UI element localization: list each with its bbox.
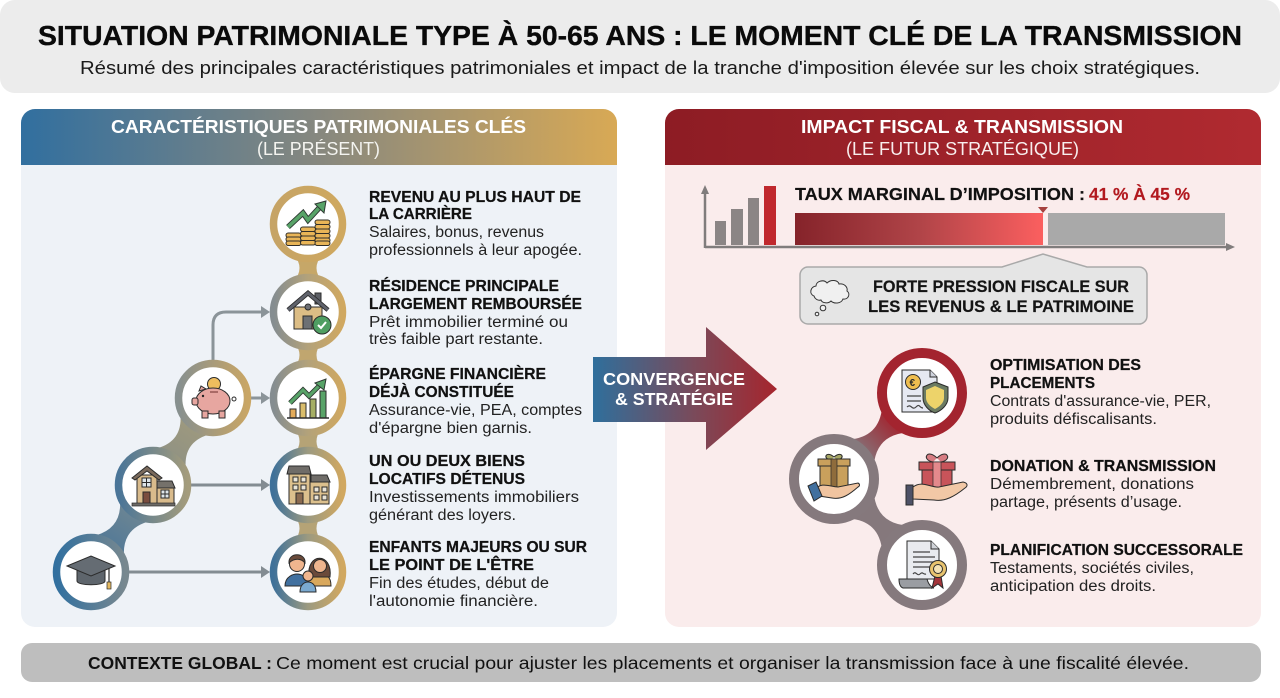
panel: caractéristiques patrimoniales [21, 109, 617, 627]
arrow: piggy to residence [213, 306, 270, 362]
item: revenu [369, 189, 582, 259]
item: optimisation [990, 357, 1211, 428]
item: planification [990, 542, 1243, 595]
callout: forte pression fiscale: LES REVENUS & LE PATRIMOINE [868, 297, 1134, 316]
icon: income coins and arrow [274, 190, 342, 258]
item: biens locatifs: Investissements immobiliers [369, 489, 579, 506]
item: revenu: Salaires, bonus, revenus [369, 224, 544, 241]
item: biens locatifs: générant des loyers. [369, 507, 516, 524]
item: biens locatifs: UN OU DEUX BIENS [369, 453, 525, 470]
item: résidence: RÉSIDENCE PRINCIPALE [369, 278, 559, 295]
item: enfants: l'autonomie financière. [369, 593, 538, 610]
icon: paid-off house [274, 278, 342, 346]
footer: contexte global: CONTEXTE GLOBAL : [88, 653, 272, 673]
item: épargne: ÉPARGNE FINANCIÈRE [369, 366, 546, 383]
mini bar chart [701, 185, 776, 248]
item: résidence [369, 278, 582, 348]
tax rate label: 41 % À 45 % [1089, 183, 1190, 204]
icon: gift in hand [906, 454, 967, 505]
item: enfants: Fin des études, début de [369, 575, 549, 592]
arrow: convergence et stratégie [593, 327, 777, 450]
panel header: impact fiscal: (LE FUTUR STRATÉGIQUE) [846, 138, 1079, 159]
item: enfants [369, 539, 587, 610]
item: enfants: LE POINT DE L'ÊTRE [369, 556, 534, 574]
icon: gift in hand circle [794, 439, 874, 519]
item: planification: Testaments, sociétés civiles, [990, 560, 1194, 577]
callout: forte pression fiscale [800, 254, 1147, 324]
icon: house [118, 450, 188, 520]
arrow: piggy to savings [251, 392, 270, 404]
item: biens locatifs [369, 453, 579, 524]
icon: document and shield: € [910, 378, 916, 389]
header band [0, 0, 1280, 93]
panel header: caractéristiques [21, 109, 617, 165]
item: biens locatifs: LOCATIFS DÉTENUS [369, 471, 525, 488]
item: donation: DONATION & TRANSMISSION [990, 458, 1216, 475]
item: épargne: DÉJÀ CONSTITUÉE [369, 384, 514, 401]
panel header: impact fiscal: IMPACT FISCAL & TRANSMISSION [801, 116, 1123, 137]
item: revenu: LA CARRIÈRE [369, 206, 472, 223]
item: épargne: Assurance-vie, PEA, comptes [369, 402, 582, 419]
panel header: caractéristiques: (LE PRÉSENT) [257, 138, 380, 159]
item: résidence: Prêt immobilier terminé ou [369, 314, 568, 331]
tax rate gauge [705, 207, 1235, 251]
item: donation [990, 458, 1216, 511]
icon: family [274, 538, 342, 606]
item: enfants: ENFANTS MAJEURS OU SUR [369, 539, 587, 556]
icon: thought cloud [811, 280, 849, 316]
item: revenu: REVENU AU PLUS HAUT DE [369, 189, 581, 206]
item: optimisation: PLACEMENTS [990, 375, 1095, 392]
icon: financial savings chart [274, 364, 342, 432]
panel: impact fiscal [665, 109, 1261, 627]
item: donation: Démembrement, donations [990, 476, 1194, 493]
icon: piggy bank [178, 364, 248, 432]
icon: rental building [274, 450, 342, 520]
item: donation: partage, présents d’usage. [990, 494, 1182, 511]
tax rate label: TAUX MARGINAL D’IMPOSITION : [795, 184, 1085, 204]
item: optimisation: Contrats d'assurance-vie, PER, [990, 393, 1211, 410]
item: optimisation: produits défiscalisants. [990, 411, 1157, 428]
item: épargne [369, 366, 582, 437]
panel header: caractéristiques: CARACTÉRISTIQUES PATRIMONIALES CLÉS [111, 116, 526, 137]
title: SITUATION PATRIMONIALE TYPE À 50-65 ANS : LE MOMENT CLÉ DE LA TRANSMISSION [38, 20, 1242, 51]
item: planification: anticipation des droits. [990, 578, 1156, 595]
item: résidence: très faible part restante. [369, 331, 543, 348]
subtitle: Résumé des principales caractéristiques patrimoniales et impact de la tranche d'imposition élevée sur les choix stratégiques. [80, 57, 1200, 78]
arrow: convergence et stratégie: & STRATÉGIE [615, 388, 733, 409]
item: épargne: d'épargne bien garnis. [369, 420, 532, 437]
footer: contexte global [21, 643, 1261, 682]
callout: forte pression fiscale: FORTE PRESSION FISCALE SUR [873, 277, 1129, 296]
footer: contexte global: Ce moment est crucial pour ajuster les placements et organiser la transmission face à une fiscalité élevée. [276, 653, 1189, 673]
item: résidence: LARGEMENT REMBOURSÉE [369, 296, 582, 313]
icon: document and shield [882, 353, 962, 433]
connectors: strategy [849, 407, 907, 551]
arrow: convergence et stratégie: CONVERGENCE [603, 369, 745, 389]
item: planification: PLANIFICATION SUCCESSORALE [990, 542, 1243, 559]
item: revenu: professionnels à leur apogée. [369, 242, 582, 259]
icon: graduation cap [56, 538, 126, 606]
icon: will and seal [882, 525, 962, 605]
arrow: graduation to children [129, 566, 270, 578]
arrow: house to rental [191, 479, 270, 491]
item: optimisation: OPTIMISATION DES [990, 357, 1141, 374]
panel header: impact fiscal [665, 109, 1261, 165]
timeline connectors [96, 255, 322, 555]
